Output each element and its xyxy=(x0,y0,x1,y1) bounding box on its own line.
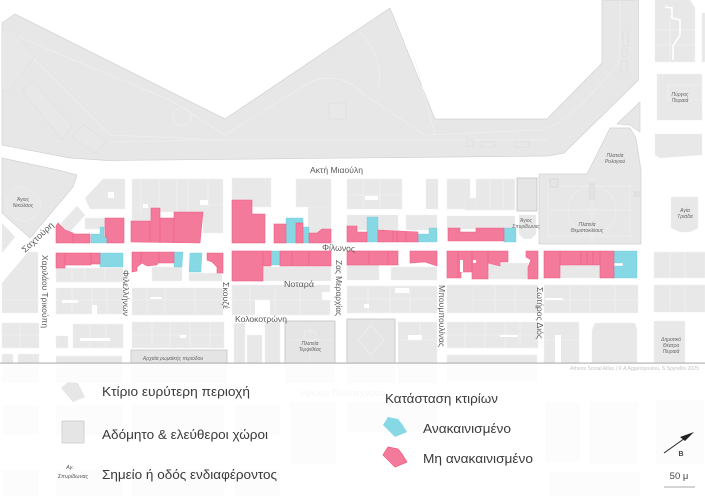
north arrow xyxy=(664,432,694,458)
non-renovated buildings xyxy=(56,200,614,281)
legend: point of interest: Σημείο ή οδός ενδιαφέροντος xyxy=(102,467,277,482)
lower-left wedge with Agios Nikolaos xyxy=(2,158,77,238)
legend: not renovated xyxy=(383,447,533,467)
scale bar: 50 μ xyxy=(670,471,688,482)
legend: open space: Αδόμητο & ελεύθεροι χώροι xyxy=(102,427,268,442)
faint map showing through the legend panel xyxy=(2,364,704,496)
grey building blocks xyxy=(2,0,705,365)
legend: not renovated: Μη ανακαινισμένο xyxy=(423,451,533,466)
street labels: Σαχτούρη xyxy=(20,220,56,254)
faint map showing through the legend panel: Ηρώων Πολυτεχνείου xyxy=(300,388,385,398)
street labels: Χαριλάου Τρικούπη xyxy=(40,255,50,328)
credit: Athens Social Atlas | © A Aggelopoulou, S Spyrellis 2025 xyxy=(570,365,699,372)
renovated buildings xyxy=(91,217,637,278)
legend: point of interest: Σπυρίδωνας xyxy=(57,474,88,480)
Agia Triada church xyxy=(671,197,698,232)
legend: point of interest xyxy=(57,465,277,482)
legend: building: Κτίριο ευρύτερη περιοχή xyxy=(102,384,250,399)
street labels: Ακτή Μιαούλη xyxy=(310,165,363,175)
street labels: Σωτήρος Διός xyxy=(535,287,545,339)
place labels: Ρολογιού xyxy=(605,158,625,165)
place labels: Πύργος xyxy=(672,91,689,98)
legend title: Κατάσταση κτιρίων xyxy=(385,391,498,406)
street labels: Μπουμπουλίνας xyxy=(437,285,447,347)
street labels: Νοταρά xyxy=(284,279,314,289)
legend: renovated: Ανακαινισμένο xyxy=(423,421,511,436)
block subdivisions and courtyards xyxy=(2,7,702,363)
open space beside Agios Spyridon xyxy=(517,178,537,211)
north arrow: Β xyxy=(678,451,684,458)
street labels: Φίλωνος xyxy=(322,242,355,254)
place labels: Πειραιά xyxy=(663,349,679,355)
legend: point of interest: Αγ. xyxy=(65,465,74,471)
street labels: Σκουζέ xyxy=(221,282,231,309)
place labels: Άγιος xyxy=(519,218,533,224)
place labels: Σπυρίδωνας xyxy=(511,224,540,230)
place labels: Αγία xyxy=(679,208,690,214)
place labels: Πλατεία xyxy=(302,341,319,347)
place labels: Τερψιθέας xyxy=(299,346,322,353)
place labels: Θεμιστοκλέους xyxy=(571,227,604,234)
map base xyxy=(2,0,698,244)
legend: building xyxy=(61,382,250,402)
place labels: Αρχαία ρωμαϊκής περιόδου xyxy=(142,355,203,362)
place labels xyxy=(13,91,693,362)
street labels xyxy=(20,165,545,347)
street labels: Φιλελλήνων xyxy=(121,270,131,316)
street labels: Κολοκοτρώνη xyxy=(235,314,287,324)
legend: renovated xyxy=(383,417,511,437)
place labels: Δημοτικό xyxy=(660,336,681,343)
legend: open space xyxy=(62,421,268,443)
place labels: Τριάδα xyxy=(677,214,693,220)
place labels: Θέατρο xyxy=(663,342,679,349)
place labels: Πειραιά xyxy=(672,98,688,104)
place labels: Άγιος xyxy=(16,197,30,203)
square: Ρολογιού and Θεμιστοκλέους xyxy=(539,128,641,244)
place labels: Πλατεία xyxy=(579,222,596,228)
small triangular islet xyxy=(617,102,640,132)
street labels: Ζας Μεραρχίας xyxy=(334,260,344,316)
waterfront open space xyxy=(2,0,638,160)
place labels: Νικόλαος xyxy=(13,202,34,209)
Agios Spyridon church xyxy=(519,215,536,239)
place labels: Πλατεία xyxy=(607,153,624,159)
legend panel xyxy=(0,362,705,498)
scale bar xyxy=(664,471,695,487)
